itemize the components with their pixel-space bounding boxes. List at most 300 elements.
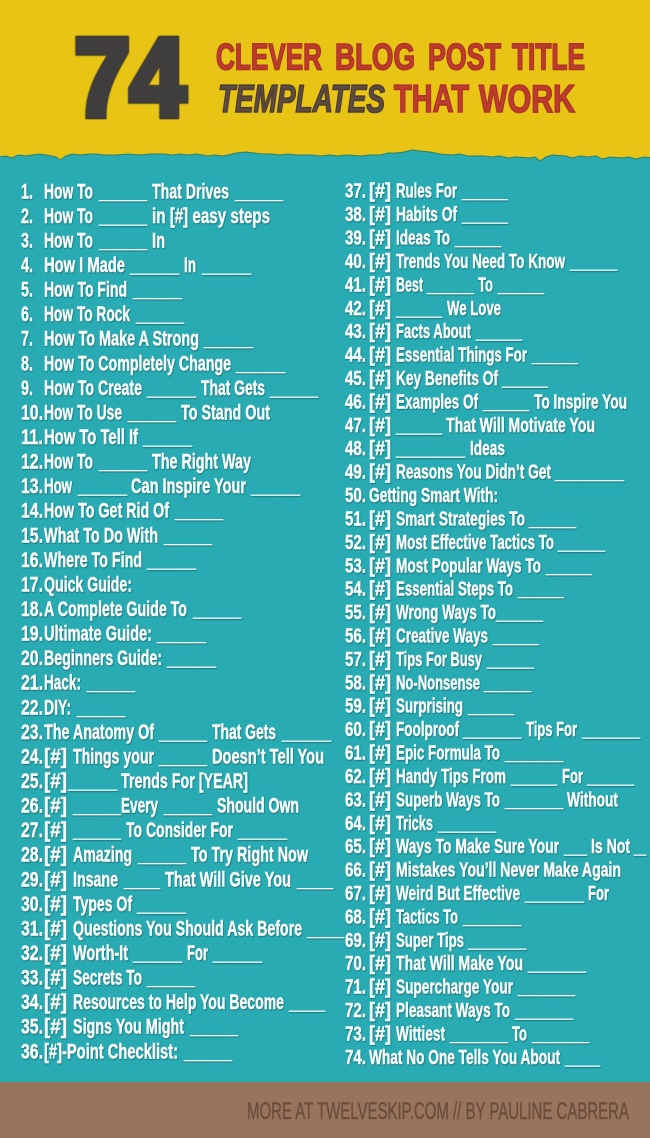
item 5: _____ xyxy=(132,278,183,302)
item 63 xyxy=(345,788,618,811)
item 73: [#] xyxy=(369,1022,391,1045)
item 17 xyxy=(21,572,132,596)
item 27: To Consider For xyxy=(126,818,233,842)
item 38: Habits Of xyxy=(396,203,457,226)
item 65: [#] xyxy=(369,835,391,858)
item 39: 39. xyxy=(345,226,366,250)
item 68: ______ xyxy=(462,905,521,928)
item 47 xyxy=(345,414,595,437)
item 5: How To Find xyxy=(44,278,127,302)
item 25: [#] xyxy=(44,769,67,793)
item 24: [#] xyxy=(44,744,67,768)
item 53: [#] xyxy=(369,554,391,577)
item 41 xyxy=(345,273,544,296)
item 54: [#] xyxy=(369,578,391,601)
item 34: Resources to Help You Become xyxy=(73,990,284,1014)
item 3 xyxy=(21,228,165,252)
item 48: 48. xyxy=(345,437,366,460)
item 4: How I Made xyxy=(44,253,125,277)
item 9 xyxy=(21,376,319,400)
item 46: [#] xyxy=(369,390,391,413)
item 65: 65. xyxy=(345,835,366,858)
item 30: Types Of xyxy=(73,892,133,916)
item 18: A Complete Guide To xyxy=(44,597,187,621)
item 20: Beginners Guide: xyxy=(44,646,162,670)
item 29: That Will Give You xyxy=(165,867,291,891)
item 27: 27. xyxy=(21,818,43,842)
item 27: _____ xyxy=(237,818,288,842)
title line 2: WORK xyxy=(479,78,575,121)
item 1: _____ xyxy=(234,179,284,203)
item 49: Reasons You Didn’t Get xyxy=(396,461,551,484)
item 16: Where To Find xyxy=(44,548,142,572)
item 32: Worth-It xyxy=(73,941,128,965)
item 37: Rules For xyxy=(396,180,457,203)
item 68 xyxy=(345,905,521,928)
item 33: Secrets To xyxy=(73,966,142,990)
item 13: How xyxy=(44,474,72,498)
item 19: _____ xyxy=(156,622,207,646)
item 15: What To Do With xyxy=(44,523,158,547)
item 63: Without xyxy=(567,788,618,811)
item 37: [#] xyxy=(369,180,391,203)
item 42: [#] xyxy=(369,297,391,320)
item 29 xyxy=(21,867,334,891)
item 23: 23. xyxy=(21,720,43,744)
item 5: 5. xyxy=(21,278,33,302)
item 50: 50. xyxy=(345,484,366,507)
item 1: That Drives xyxy=(152,179,229,203)
item 20: 20. xyxy=(21,646,43,670)
item 38: [#] xyxy=(369,203,391,226)
item 69 xyxy=(345,929,526,952)
item 15: 15. xyxy=(21,523,43,547)
item 69: [#] xyxy=(369,929,391,952)
item 69: ______ xyxy=(467,929,526,952)
item 11: _____ xyxy=(142,425,193,449)
item 36: [#]-Point Checklist: xyxy=(44,1039,178,1063)
item 49: [#] xyxy=(369,461,391,484)
item 4: In xyxy=(184,253,196,277)
item 22: DIY: xyxy=(44,695,71,719)
item 62: Handy Tips From xyxy=(396,765,506,788)
item 72: 72. xyxy=(345,999,366,1022)
item 74: What No One Tells You About xyxy=(369,1046,560,1069)
item 64: ______ xyxy=(437,812,496,835)
item 36: 36. xyxy=(21,1039,43,1063)
item 7: _____ xyxy=(203,327,254,351)
item 44: 44. xyxy=(345,344,366,367)
right list column: items 37 to 74 xyxy=(345,180,647,1069)
item 32: [#] xyxy=(44,941,67,965)
item 7: 7. xyxy=(21,327,33,351)
item 55: _____ xyxy=(495,601,543,624)
item 42: We Love xyxy=(447,297,501,320)
item 30: _____ xyxy=(136,892,187,916)
item 45: _____ xyxy=(501,367,548,390)
item 40: [#] xyxy=(369,250,391,273)
item 29: ____ xyxy=(123,867,161,891)
item 58: [#] xyxy=(369,671,391,694)
item 58: No-Nonsense xyxy=(396,671,480,694)
item 6: How To Rock xyxy=(44,302,130,326)
title line 1: BLOG xyxy=(335,36,415,78)
item 41: 41. xyxy=(345,273,366,296)
item 24 xyxy=(21,744,324,768)
item 30 xyxy=(21,892,187,916)
item 64: Tricks xyxy=(396,812,433,835)
item 6: _____ xyxy=(135,302,185,326)
item 65: Ways To Make Sure Your xyxy=(396,835,559,858)
item 62: [#] xyxy=(369,765,391,788)
item 67: For xyxy=(588,882,609,905)
item 25: 25. xyxy=(21,769,43,793)
item 35: [#] xyxy=(44,1015,67,1039)
item 73: 73. xyxy=(345,1022,366,1045)
item 2 xyxy=(21,204,270,228)
item 12 xyxy=(21,450,251,474)
item 9: _____ xyxy=(146,376,197,400)
item 35: Signs You Might xyxy=(73,1015,184,1039)
item 34 xyxy=(21,990,326,1014)
item 28: [#] xyxy=(44,843,67,867)
item 65: ___ xyxy=(563,835,587,858)
item 45: [#] xyxy=(369,367,391,390)
title number 74: 74 xyxy=(74,16,186,140)
item 28 xyxy=(21,843,308,867)
item 26 xyxy=(21,794,299,818)
item 20: _____ xyxy=(166,646,217,670)
item 63: ______ xyxy=(504,788,563,811)
item 26: [#] xyxy=(44,794,67,818)
item 53: _____ xyxy=(545,554,592,577)
item 23: _____ xyxy=(158,720,208,744)
item 27 xyxy=(21,818,288,842)
item 11: 11. xyxy=(21,425,43,449)
item 22: _____ xyxy=(76,695,126,719)
title line 1 xyxy=(216,36,585,78)
item 12: _____ xyxy=(98,450,148,474)
item 31: ____ xyxy=(306,916,345,940)
item 52: Most Effective Tactics To xyxy=(396,531,554,554)
item 17: Quick Guide: xyxy=(44,572,132,596)
item 48 xyxy=(345,437,505,460)
item 19: Ultimate Guide: xyxy=(44,622,152,646)
item 37: 37. xyxy=(345,180,366,203)
item 69: Super Tips xyxy=(396,929,464,952)
item 64: [#] xyxy=(369,812,391,835)
item 54: 54. xyxy=(345,578,366,601)
item 17: 17. xyxy=(21,572,43,596)
item 1: 1. xyxy=(21,179,33,203)
item 45: Key Benefits Of xyxy=(396,367,498,390)
item 25: Trends For [YEAR] xyxy=(121,769,248,793)
item 27: _____ xyxy=(72,818,122,842)
item 38: 38. xyxy=(345,203,366,226)
item 66: 66. xyxy=(345,859,366,882)
item 33: [#] xyxy=(44,966,67,990)
item 26: _____ xyxy=(72,794,122,818)
item 67: 67. xyxy=(345,882,366,905)
item 59: Surprising xyxy=(396,695,463,718)
item 62: For xyxy=(562,765,583,788)
item 55: Wrong Ways To xyxy=(396,601,496,624)
item 57: Tips For Busy xyxy=(396,648,482,671)
item 43: [#] xyxy=(369,320,391,343)
item 24: Doesn’t Tell You xyxy=(212,744,324,768)
item 71: [#] xyxy=(369,976,391,999)
item 32: _____ xyxy=(132,941,183,965)
item 59: [#] xyxy=(369,695,391,718)
item 23: _____ xyxy=(281,720,332,744)
item 29: 29. xyxy=(21,867,43,891)
item 3: In xyxy=(152,228,165,252)
item 34: 34. xyxy=(21,990,43,1014)
item 41: _____ xyxy=(497,273,544,296)
item 8: _____ xyxy=(235,351,286,375)
item 44: [#] xyxy=(369,344,391,367)
item 62 xyxy=(345,765,634,788)
item 69: 69. xyxy=(345,929,366,952)
item 42: 42. xyxy=(345,297,366,320)
header panel: yellow torn paper xyxy=(0,0,650,161)
item 62: 62. xyxy=(345,765,366,788)
item 26: _____ xyxy=(163,794,213,818)
item 14: _____ xyxy=(174,499,224,523)
item 51: [#] xyxy=(369,507,391,530)
item 74: ____ xyxy=(564,1046,600,1069)
item 10: To Stand Out xyxy=(181,400,270,424)
item 47: _____ xyxy=(395,414,442,437)
item 9: That Gets xyxy=(201,376,265,400)
item 22: 22. xyxy=(21,695,43,719)
item 10: _____ xyxy=(127,400,177,424)
item 54: Essential Steps To xyxy=(396,578,513,601)
item 61: ______ xyxy=(504,742,563,764)
footer panel xyxy=(0,1082,650,1138)
item 70: ______ xyxy=(527,952,586,975)
item 31: Questions You Should Ask Before xyxy=(73,916,302,940)
item 28: Amazing xyxy=(73,843,132,867)
item 49: _______ xyxy=(554,461,625,484)
item 32: _____ xyxy=(212,941,263,965)
item 63: 63. xyxy=(345,788,366,811)
item 43: _____ xyxy=(475,320,522,343)
item 67: Weird But Effective xyxy=(396,882,520,905)
item 29: [#] xyxy=(44,867,67,891)
item 7: How To Make A Strong xyxy=(44,327,199,351)
item 58: _____ xyxy=(483,671,531,694)
item 67: [#] xyxy=(369,882,391,905)
item 21: Hack: xyxy=(44,671,81,695)
item 39 xyxy=(345,226,501,250)
item 43 xyxy=(345,320,522,343)
item 25 xyxy=(21,769,248,793)
item 29: Insane xyxy=(73,867,118,891)
item 46: 46. xyxy=(345,390,366,413)
item 9: How To Create xyxy=(44,376,142,400)
item 15: _____ xyxy=(163,523,213,547)
item 60: ______ xyxy=(462,718,521,741)
item 62: _____ xyxy=(586,765,634,788)
item 1: _____ xyxy=(98,179,148,203)
item 33 xyxy=(21,966,196,990)
item 12: 12. xyxy=(21,450,43,474)
item 41: [#] xyxy=(369,273,391,296)
item 9: 9. xyxy=(21,376,33,400)
item 53: 53. xyxy=(345,554,366,577)
item 13: _____ xyxy=(77,474,128,498)
item 55: 55. xyxy=(345,601,366,624)
item 49: 49. xyxy=(345,461,366,484)
item 13: _____ xyxy=(250,474,301,498)
item 23 xyxy=(21,720,332,744)
item 53: Most Popular Ways To xyxy=(396,554,541,577)
item 51: Smart Strategies To xyxy=(396,507,525,530)
item 19: 19. xyxy=(21,622,43,646)
item 44: Essential Things For xyxy=(396,344,527,367)
item 21: 21. xyxy=(21,671,43,695)
item 22 xyxy=(21,695,126,719)
item 38: _____ xyxy=(461,203,508,226)
item 31 xyxy=(21,916,345,940)
item 72: [#] xyxy=(369,999,391,1022)
item 65: Is Not xyxy=(591,835,630,858)
item 48: _______ xyxy=(395,437,466,460)
item 8: 8. xyxy=(21,351,33,375)
item 51: _____ xyxy=(528,507,576,530)
item 4: 4. xyxy=(21,253,33,277)
item 10: How To Use xyxy=(44,400,122,424)
item 73: To xyxy=(512,1022,527,1045)
item 37 xyxy=(345,180,508,203)
item 39: _____ xyxy=(454,226,501,250)
item 64: 64. xyxy=(345,812,366,835)
item 39: Ideas To xyxy=(396,226,450,250)
item 40: 40. xyxy=(345,250,366,273)
item 24: 24. xyxy=(21,744,43,768)
item 14: How To Get Rid Of xyxy=(44,499,170,523)
item 70: 70. xyxy=(345,952,366,975)
item 28: To Try Right Now xyxy=(191,843,308,867)
item 47: 47. xyxy=(345,414,366,437)
left list column: items 1 to 36 xyxy=(21,179,345,1063)
item 72: ______ xyxy=(514,999,573,1022)
item 2: How To xyxy=(44,204,93,228)
item 54: _____ xyxy=(517,578,564,601)
item 57: [#] xyxy=(369,648,391,671)
item 28: _____ xyxy=(137,843,187,867)
item 48: [#] xyxy=(369,437,391,460)
item 68: 68. xyxy=(345,905,366,928)
item 29: ____ xyxy=(296,867,334,891)
item 59: _____ xyxy=(467,695,514,718)
item 73: ______ xyxy=(531,1022,589,1045)
item 56: [#] xyxy=(369,624,391,648)
item 44: _____ xyxy=(531,344,578,367)
item 21 xyxy=(21,671,136,695)
title line 1: TITLE xyxy=(512,36,585,78)
item 58: 58. xyxy=(345,671,366,694)
item 73 xyxy=(345,1022,589,1045)
item 40: Trends You Need To Know xyxy=(396,250,565,273)
item 57: 57. xyxy=(345,648,366,671)
item 13: 13. xyxy=(21,474,43,498)
item 1: How To xyxy=(44,179,93,203)
item 46: Examples Of xyxy=(396,390,478,413)
item 31: 31. xyxy=(21,916,43,940)
item 59 xyxy=(345,695,514,718)
item 57: _____ xyxy=(486,648,534,671)
item 43: 43. xyxy=(345,320,366,343)
item 48: Ideas xyxy=(470,437,505,460)
item 27: [#] xyxy=(44,818,67,842)
item 26: 26. xyxy=(21,794,43,818)
item 12: How To xyxy=(44,450,93,474)
item 52: 52. xyxy=(345,531,366,554)
item 26: Should Own xyxy=(217,794,299,818)
item 56: _____ xyxy=(492,624,539,648)
item 3: 3. xyxy=(21,228,33,252)
item 33: _____ xyxy=(146,966,196,990)
item 24: _____ xyxy=(158,744,208,768)
item 35: _____ xyxy=(189,1015,239,1039)
item 50: Getting Smart With: xyxy=(369,484,498,507)
item 30: [#] xyxy=(44,892,67,916)
item 70: [#] xyxy=(369,952,391,975)
item 13 xyxy=(21,474,301,498)
title line 1: CLEVER xyxy=(216,36,322,78)
item 60: 60. xyxy=(345,718,366,741)
item 41: _____ xyxy=(426,273,474,296)
item 21: _____ xyxy=(86,671,136,695)
title line 2: THAT xyxy=(394,78,469,121)
item 64 xyxy=(345,812,496,835)
item 16: 16. xyxy=(21,548,43,572)
item 9: _____ xyxy=(269,376,319,400)
item 33: 33. xyxy=(21,966,43,990)
item 31: [#] xyxy=(44,916,67,940)
item 61: [#] xyxy=(369,742,391,764)
item 14: 14. xyxy=(21,499,43,523)
item 61: 61. xyxy=(345,742,366,764)
item 18: _____ xyxy=(192,597,242,621)
item 73: ______ xyxy=(449,1022,508,1045)
item 71: ______ xyxy=(517,976,575,999)
item 6: 6. xyxy=(21,302,33,326)
item 18: 18. xyxy=(21,597,43,621)
item 63: Superb Ways To xyxy=(396,788,500,811)
item 32 xyxy=(21,941,263,965)
item 8: How To Completely Change xyxy=(44,351,231,375)
item 4: _____ xyxy=(201,253,252,277)
item 16: _____ xyxy=(146,548,197,572)
item 23: The Anatomy Of xyxy=(44,720,155,744)
title line 2: TEMPLATES xyxy=(218,78,385,121)
item 43: Facts About xyxy=(396,320,471,343)
item 63: [#] xyxy=(369,788,391,811)
item 51: 51. xyxy=(345,507,366,530)
item 62: _____ xyxy=(510,765,557,788)
item 42: _____ xyxy=(395,297,442,320)
item 11: How To Tell If xyxy=(44,425,139,449)
item 71: 71. xyxy=(345,976,366,999)
item 13: Can Inspire Your xyxy=(131,474,246,498)
item 40: _____ xyxy=(569,250,617,273)
item 37: _____ xyxy=(461,180,508,203)
item 12: The Right Way xyxy=(152,450,251,474)
item 32: 32. xyxy=(21,941,43,965)
